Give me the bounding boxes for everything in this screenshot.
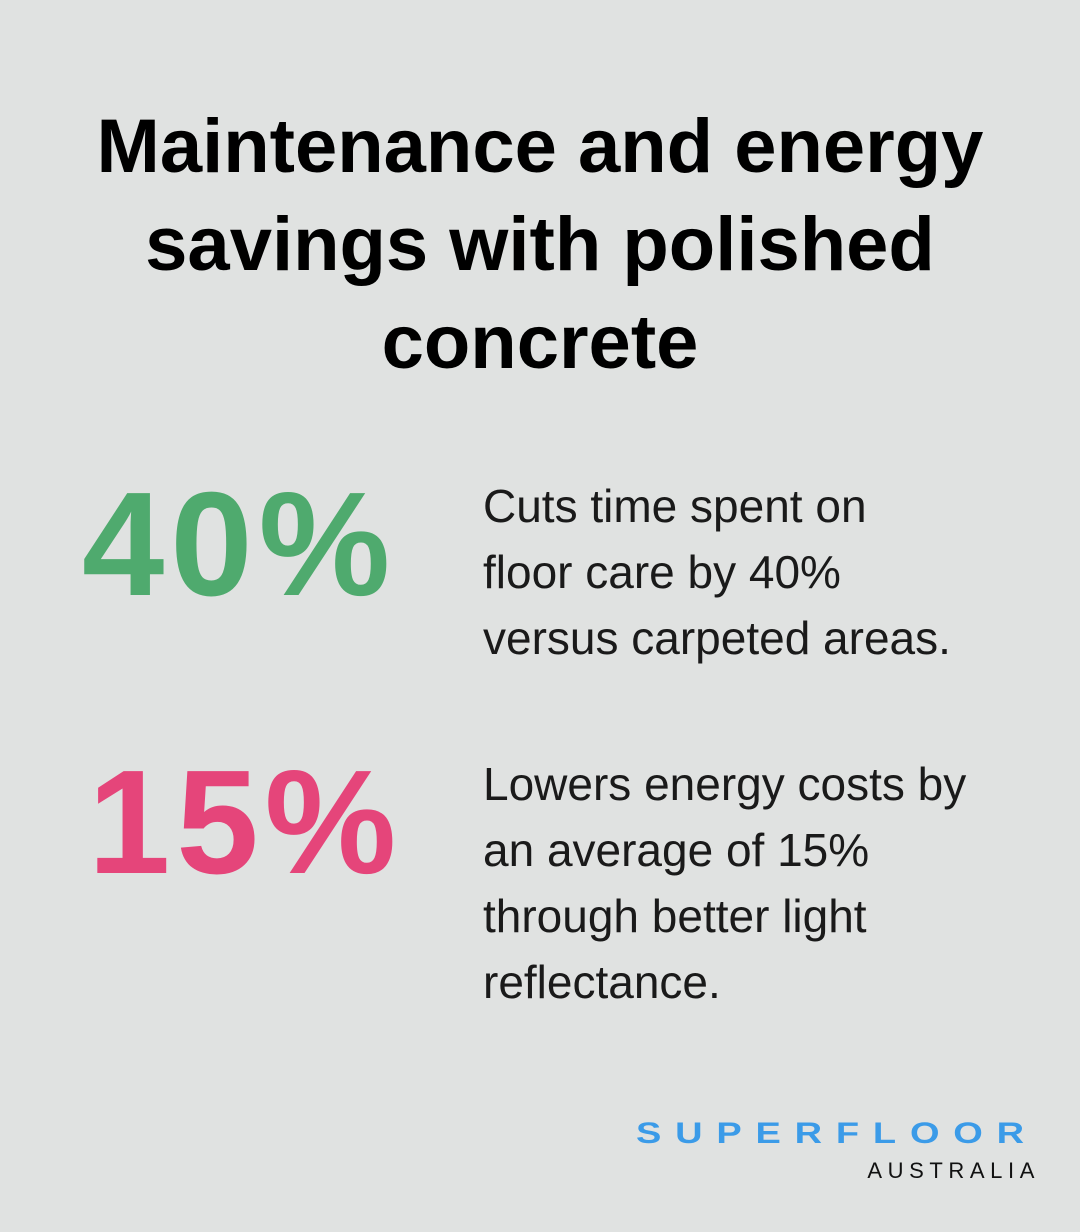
logo [636, 1117, 1040, 1183]
text: energy costs: Lowers energy costs by [483, 758, 966, 810]
title: savings with polished [145, 202, 935, 287]
text: energy costs: reflectance. [483, 956, 721, 1008]
text: floor care: versus carpeted areas. [483, 612, 951, 664]
text: energy costs: an average of 15% [483, 824, 869, 876]
text: floor care: floor care by 40% [483, 546, 841, 598]
stat: 40%: 40% [82, 462, 396, 627]
text: energy costs [483, 758, 966, 1008]
title: Maintenance and energy [97, 104, 983, 189]
logo: AUSTRALIA: AUSTRALIA [867, 1158, 1040, 1183]
stat: 15%: 15% [88, 740, 402, 905]
text: floor care: Cuts time spent on [483, 480, 867, 532]
logo: SUPERFLOOR: SUPERFLOOR [636, 1117, 1038, 1150]
title: concrete [382, 300, 698, 385]
title [97, 104, 983, 385]
text: floor care [483, 480, 951, 664]
text: energy costs: through better light [483, 890, 867, 942]
